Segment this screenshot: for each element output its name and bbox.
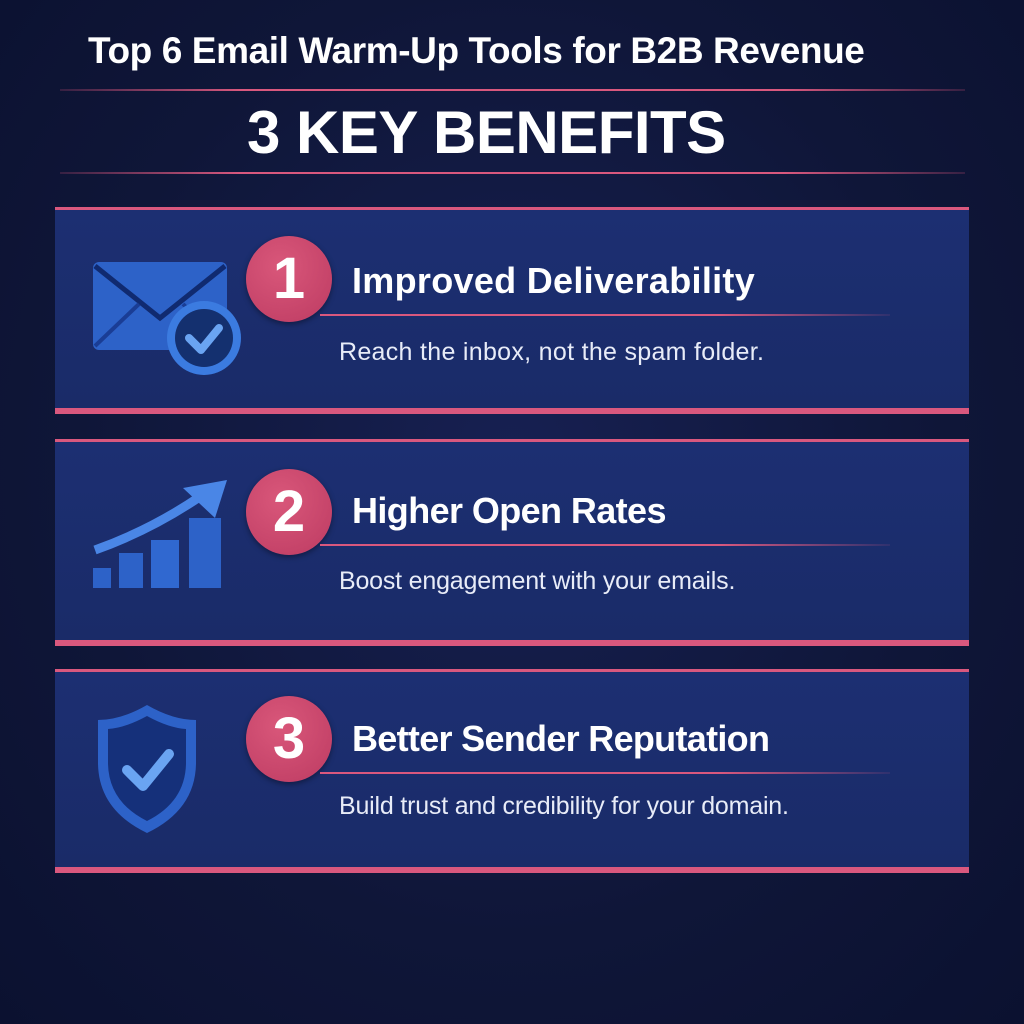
badge 1: 1 bbox=[273, 246, 305, 311]
panel: higher sender reputation bbox=[55, 669, 969, 873]
badge 2 bbox=[246, 469, 332, 555]
icon: envelope with check bbox=[93, 262, 241, 375]
description: Boost engagement with your emails. bbox=[339, 567, 735, 595]
panel: higher open rates bbox=[55, 439, 969, 646]
description: Build trust and credibility for your domain. bbox=[339, 792, 789, 820]
heading: Improved Deliverability bbox=[352, 260, 755, 301]
badge 2: 2 bbox=[273, 479, 305, 544]
title: Top 6 Email Warm-Up Tools for B2B Revenue bbox=[88, 30, 864, 71]
description: Reach the inbox, not the spam folder. bbox=[339, 338, 764, 366]
badge 1 bbox=[246, 236, 332, 322]
icon: shield with check bbox=[98, 705, 196, 833]
icon: bar chart with arrow bbox=[93, 480, 227, 588]
panel: improved deliverability bbox=[55, 207, 969, 414]
heading: 3 key benefits: 3 KEY BENEFITS bbox=[247, 99, 726, 166]
heading: Higher Open Rates bbox=[352, 490, 666, 531]
heading: Better Sender Reputation bbox=[352, 718, 769, 759]
badge 3 bbox=[246, 696, 332, 782]
badge 3: 3 bbox=[273, 706, 305, 771]
